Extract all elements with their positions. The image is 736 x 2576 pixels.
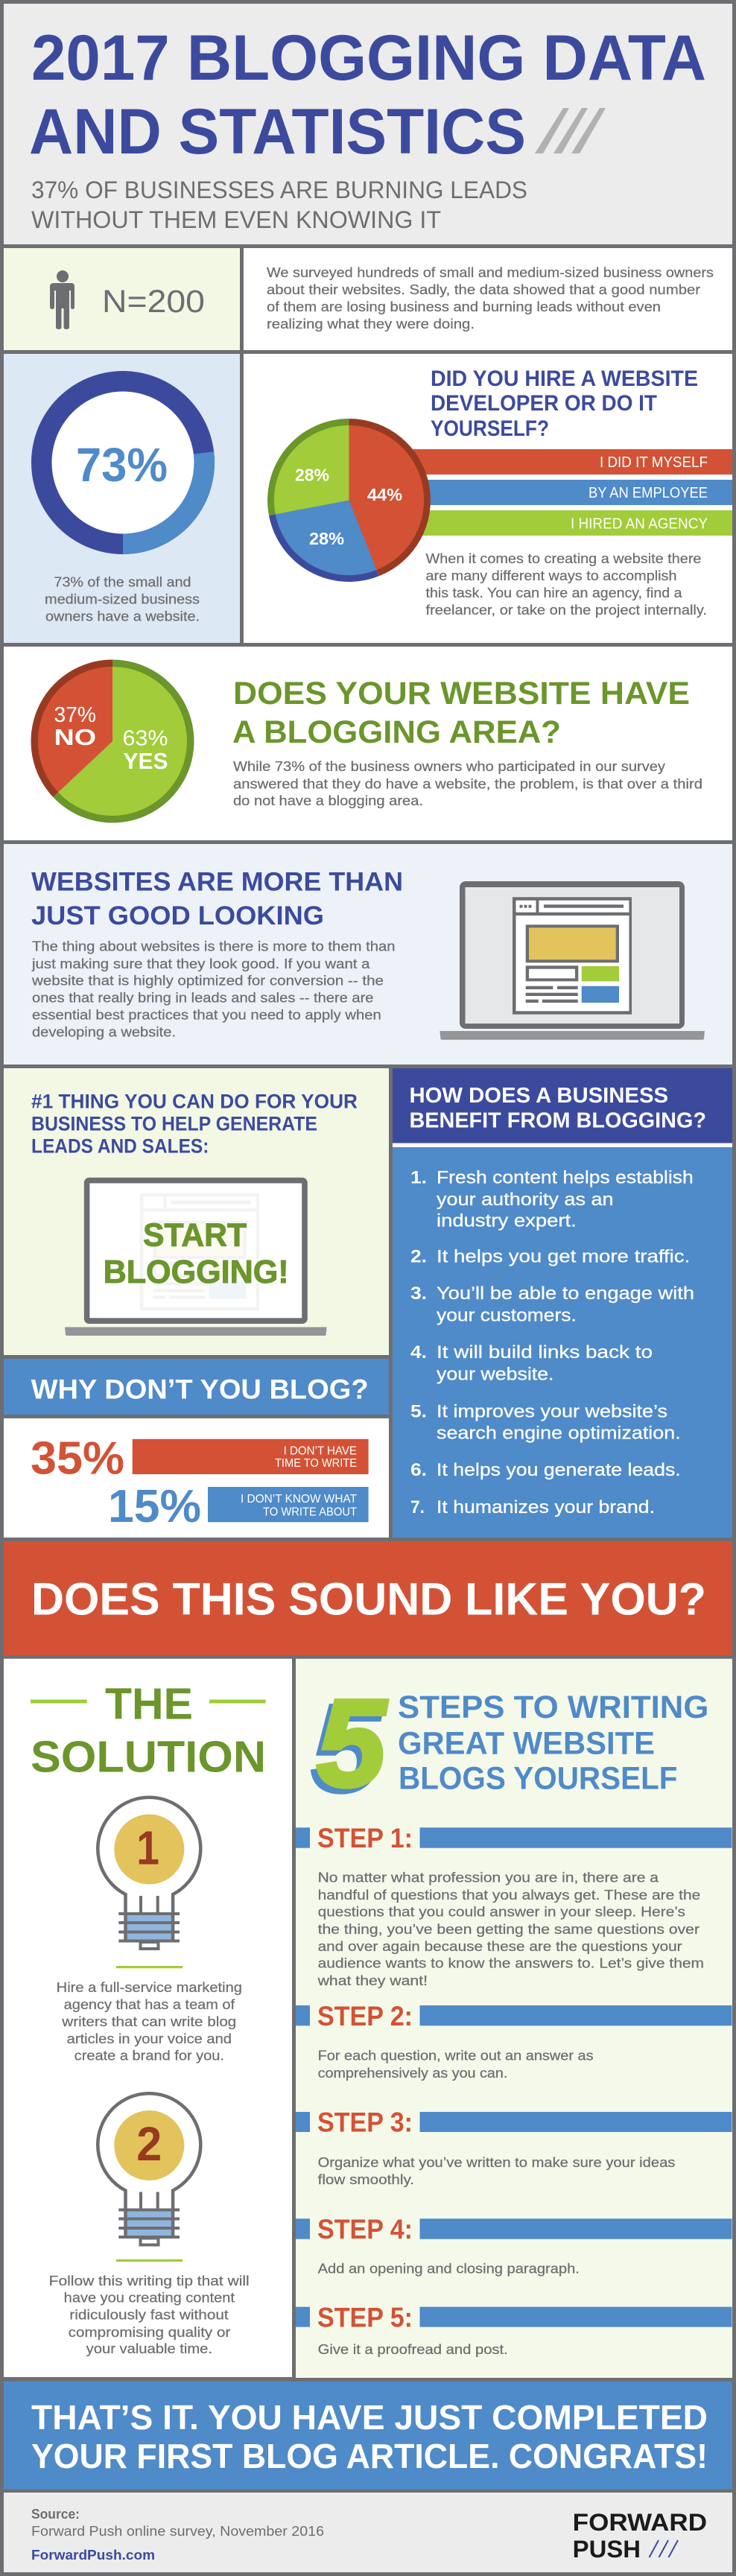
- heading: #1 THING YOU CAN DO FOR YOUR: [31, 1090, 358, 1112]
- step 4: [296, 2213, 732, 2277]
- text block: [31, 939, 396, 1040]
- caption: 73% of the small and: [54, 574, 191, 590]
- benefits list: It helps you get more traffic.: [437, 1246, 690, 1266]
- panel: 73 percent have a website: [4, 354, 240, 643]
- benefits list: You’ll be able to engage with: [437, 1284, 694, 1304]
- heading: HOW DOES A BUSINESS: [410, 1084, 668, 1108]
- step 3: Organize what you’ve written to make sure your ideas: [318, 2154, 675, 2170]
- heading: [431, 367, 698, 441]
- heading: [31, 1679, 266, 1782]
- stat: 35 percent: TIME TO WRITE: [275, 1457, 357, 1470]
- text block: hire options: freelancer, or take on the project internally.: [426, 602, 707, 618]
- legend bars: [387, 449, 732, 536]
- step 3: STEP 3:: [317, 2107, 413, 2138]
- step 2: For each question, write out an answer as: [318, 2048, 594, 2063]
- benefits list: 2.: [410, 1246, 427, 1266]
- subtitle: 37% OF BUSINESSES ARE BURNING LEADS: [31, 177, 527, 203]
- stat: 15 percent: [108, 1481, 369, 1532]
- text block: intro: We surveyed hundreds of small and medium-sized business owners: [267, 264, 714, 280]
- text block: intro: [267, 264, 714, 331]
- panel: congrats banner: [4, 2382, 732, 2490]
- heading: BLOGS YOURSELF: [399, 1761, 678, 1797]
- divider line 2: [116, 2259, 183, 2262]
- benefits list: 4.: [410, 1342, 427, 1362]
- heading: LEADS AND SALES:: [31, 1135, 209, 1158]
- step 4: STEP 4:: [317, 2213, 413, 2245]
- heading: WEBSITES ARE MORE THAN: [31, 867, 403, 897]
- text block: solution 2: compromising quality or: [69, 2324, 230, 2340]
- text block: solution 1: articles in your voice and: [67, 2031, 232, 2046]
- icon: light bulb 1: 1: [136, 1821, 159, 1874]
- text block: just making sure that they look good. If you want a: [31, 956, 370, 971]
- text block: [233, 758, 702, 808]
- panel: does this sound like you: DOES THIS SOUND LIKE YOU?: [31, 1574, 706, 1625]
- caption: owners have a website.: [45, 608, 200, 624]
- text block: intro: about their websites. Sadly, the data showed that a good number: [267, 282, 700, 297]
- panel: five steps: [296, 1659, 732, 2378]
- divider line 1: [116, 1966, 183, 1968]
- legend bars: I HIRED AN AGENCY: [571, 515, 708, 532]
- icon: light bulb 1: [98, 1798, 200, 1949]
- benefits list: your website.: [437, 1365, 554, 1385]
- icon: laptop start blogging: BLOGGING!: [104, 1254, 289, 1290]
- icon: laptop start blogging: START: [143, 1217, 247, 1253]
- logo: PUSH: [573, 2536, 641, 2563]
- panel: why don't you blog heading: WHY DON’T YOU BLOG?: [31, 1374, 369, 1405]
- source text: ForwardPush.com: [31, 2548, 155, 2563]
- heading: A BLOGGING AREA?: [232, 714, 561, 750]
- pie chart: 28%: [309, 529, 344, 548]
- panel: why don't you blog heading: [4, 1359, 389, 1415]
- panel: websites more than good looking: [4, 844, 732, 1065]
- text block: essential best practices that you need to apply when: [32, 1007, 381, 1023]
- text block: solution 1: writers that can write blog: [61, 2014, 236, 2029]
- heading: GREAT WEBSITE: [398, 1725, 655, 1761]
- text block: answered that they do have a website, the problem, is that over a third: [233, 776, 702, 791]
- benefits list: 1.: [410, 1167, 427, 1187]
- text block: solution 1: create a brand for you.: [74, 2048, 224, 2063]
- panel: congrats banner: THAT’S IT. YOU HAVE JUST COMPLETED: [31, 2398, 708, 2437]
- stat: 15 percent: I DON’T KNOW WHAT: [241, 1493, 357, 1506]
- legend bars: I DID IT MYSELF: [600, 454, 708, 471]
- stat: 15 percent: TO WRITE ABOUT: [263, 1506, 357, 1518]
- pie chart: yes no: [31, 659, 194, 822]
- benefits list: your customers.: [437, 1305, 577, 1326]
- panel: blogging area: [4, 647, 732, 840]
- text block: website that is highly optimized for conversion -- the: [31, 973, 384, 989]
- source text: Source:: [31, 2507, 80, 2522]
- text block: hire options: When it comes to creating a website there: [426, 551, 702, 566]
- step 2: comprehensively as you can.: [318, 2065, 507, 2081]
- step 1: [296, 1822, 732, 1988]
- text block: do not have a blogging area.: [233, 793, 423, 808]
- text block: solution 2: ridiculously fast without: [69, 2307, 229, 2323]
- panel: hire a developer: [244, 354, 732, 643]
- text block: The thing about websites is there is more to them than: [32, 939, 395, 954]
- heading: [31, 867, 403, 930]
- panel: congrats banner: YOUR FIRST BLOG ARTICLE. CONGRATS!: [31, 2437, 708, 2475]
- benefits list: 6.: [410, 1460, 427, 1480]
- heading: DEVELOPER OR DO IT: [431, 391, 657, 416]
- heading: [393, 1068, 732, 1143]
- benefits list: 3.: [410, 1284, 427, 1304]
- title: AND STATISTICS: [29, 96, 526, 168]
- text block: While 73% of the business owners who participated in our survey: [233, 758, 666, 774]
- text block: solution 2: have you creating content: [64, 2290, 235, 2306]
- caption: medium-sized business: [45, 591, 200, 606]
- text block: hire options: this task. You can hire an agency, find a: [426, 585, 682, 600]
- subtitle: [31, 177, 527, 233]
- icon: light bulb 2: 2: [136, 2117, 162, 2171]
- caption: [45, 574, 200, 624]
- step 3: flow smoothly.: [318, 2171, 414, 2187]
- text block: intro: realizing what they were doing.: [267, 316, 475, 331]
- benefits list: 5.: [410, 1401, 427, 1421]
- icon: light bulb 2: [98, 2093, 200, 2245]
- donut chart: [31, 371, 215, 554]
- text block: solution 1: agency that has a team of: [64, 1996, 235, 2012]
- stat: 35 percent: [31, 1433, 369, 1484]
- source text: [31, 2507, 324, 2563]
- benefits list: 7.: [410, 1497, 425, 1517]
- benefits list: [410, 1167, 694, 1517]
- step 1: what they want!: [317, 1973, 428, 1988]
- logo: [573, 2509, 707, 2563]
- icon: laptop start blogging: [65, 1178, 327, 1336]
- pie chart: yes no: 63%: [122, 727, 168, 751]
- text block: solution 2: [49, 2273, 250, 2356]
- panel: survey intro: [244, 248, 732, 350]
- step 2: STEP 2:: [317, 2000, 413, 2031]
- benefits list: search engine optimization.: [437, 1423, 681, 1443]
- pie chart: 28%: [295, 465, 329, 484]
- panel: does this sound like you: [4, 1541, 732, 1655]
- heading: [398, 1690, 708, 1797]
- legend bars: BY AN EMPLOYEE: [589, 485, 708, 501]
- benefits list: your authority as an: [437, 1190, 614, 1210]
- heading: THE: [105, 1679, 193, 1728]
- pie chart: [267, 419, 431, 582]
- benefits list: industry expert.: [437, 1211, 577, 1231]
- logo: FORWARD: [573, 2509, 707, 2536]
- icon: laptop with web page: [440, 881, 705, 1040]
- pie chart: yes no: YES: [124, 748, 168, 774]
- pie chart: yes no: NO: [54, 724, 96, 750]
- text block: ones that really bring in leads and sales -- there are: [32, 990, 374, 1006]
- step 1: handful of questions that you always get. These are the: [318, 1887, 700, 1903]
- benefits list: It will build links back to: [437, 1342, 653, 1362]
- big number five: 5: [317, 1675, 387, 1813]
- icon: person: [50, 270, 74, 329]
- step 3: [296, 2107, 732, 2187]
- benefits list: Fresh content helps establish: [437, 1167, 694, 1187]
- icon: triple slash: [535, 108, 606, 153]
- sample size label: N=200: [102, 284, 205, 320]
- step 1: the thing, you’ve been getting the same questions over: [318, 1921, 699, 1937]
- panel: why don't you blog stats: [4, 1418, 389, 1538]
- step 4: Add an opening and closing paragraph.: [318, 2261, 580, 2277]
- text block: solution 1: [57, 1979, 242, 2063]
- text block: solution 1: Hire a full-service marketing: [57, 1979, 242, 1995]
- benefits list: It helps you generate leads.: [437, 1460, 681, 1480]
- step 1: STEP 1:: [317, 1822, 413, 1853]
- step 1: audience wants to know the answers to. Let’s give them: [318, 1955, 704, 1971]
- benefits list: It improves your website’s: [437, 1401, 667, 1421]
- step 1: questions that you could answer in your sleep. Here’s: [318, 1904, 685, 1920]
- panel: sample size: [4, 248, 240, 350]
- step 1: No matter what profession you are in, there are a: [318, 1870, 659, 1885]
- heading: [31, 1090, 358, 1158]
- heading: BENEFIT FROM BLOGGING?: [410, 1108, 706, 1132]
- step 1: and over again because these are the questions your: [318, 1938, 682, 1954]
- text block: intro: of them are losing business and burning leads without even: [267, 299, 661, 314]
- stat: 15 percent: 15%: [108, 1481, 201, 1532]
- heading: STEPS TO WRITING: [398, 1690, 708, 1725]
- step 5: [296, 2301, 732, 2357]
- subtitle: WITHOUT THEM EVEN KNOWING IT: [31, 206, 441, 233]
- panel: number one thing: [4, 1068, 389, 1355]
- text block: solution 2: Follow this writing tip that will: [49, 2273, 250, 2288]
- text block: hire options: are many different ways to accomplish: [426, 568, 676, 583]
- source text: Forward Push online survey, November 2016: [31, 2524, 324, 2539]
- heading: BUSINESS TO HELP GENERATE: [31, 1113, 317, 1135]
- panel: the solution: [4, 1659, 292, 2377]
- title: 2017 BLOGGING DATA: [31, 22, 706, 94]
- step 5: Give it a proofread and post.: [318, 2341, 508, 2357]
- panel: footer: [4, 2493, 732, 2572]
- stat: 35 percent: I DON’T HAVE: [284, 1444, 357, 1457]
- panel: header: [4, 4, 732, 244]
- heading: [232, 676, 690, 750]
- title: [29, 22, 706, 168]
- heading: JUST GOOD LOOKING: [31, 901, 324, 930]
- donut chart: 73%: [76, 438, 168, 492]
- heading: DOES YOUR WEBSITE HAVE: [233, 676, 690, 711]
- text block: solution 2: your valuable time.: [86, 2341, 212, 2356]
- stat: 35 percent: 35%: [31, 1433, 124, 1484]
- panel: benefits of blogging: [393, 1068, 732, 1538]
- step 2: [296, 2000, 732, 2081]
- step 5: STEP 5:: [317, 2301, 413, 2332]
- heading: YOURSELF?: [431, 416, 549, 441]
- heading: SOLUTION: [31, 1733, 266, 1782]
- pie chart: yes no: 37%: [54, 703, 96, 727]
- text block: hire options: [426, 551, 707, 618]
- benefits list: It humanizes your brand.: [437, 1497, 655, 1517]
- heading: DID YOU HIRE A WEBSITE: [431, 367, 698, 391]
- text block: developing a website.: [32, 1024, 176, 1040]
- big number five: 5: [311, 1679, 382, 1818]
- pie chart: 44%: [367, 485, 402, 504]
